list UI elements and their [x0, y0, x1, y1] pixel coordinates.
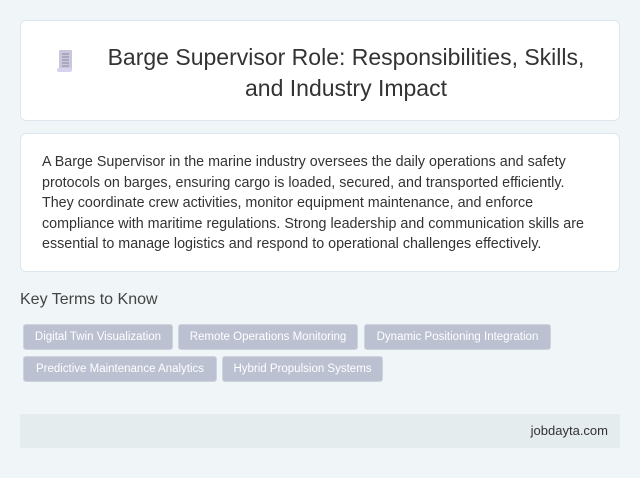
key terms heading: Key Terms to Know: [20, 291, 158, 308]
tag 2: Remote Operations Monitoring: [190, 331, 346, 343]
tag 3: Dynamic Positioning Integration: [377, 331, 538, 343]
description card: [20, 133, 620, 272]
tag 1: Digital Twin Visualization: [35, 331, 161, 343]
footer text: jobdayta.com: [531, 423, 608, 438]
tag 2: [178, 324, 358, 350]
tag 4: Predictive Maintenance Analytics: [36, 363, 204, 375]
header card: [20, 20, 620, 121]
tag 5: [222, 356, 383, 382]
icon: document: [57, 50, 72, 72]
footer: [20, 414, 620, 448]
description text: A Barge Supervisor in the marine industry oversees the daily operations and safety protocols on barges, ensuring cargo is loaded, secured, and transported efficiently. They coordinate crew activities, monitor equipment maintenance, and enforce compliance with maritime regulations. Strong leadership and communication skills are essential to manage logistics and respond to operational challenges effectively.: [42, 154, 584, 252]
title: Barge Supervisor Role: Responsibilities, Skills, and Industry Impact: [108, 44, 584, 101]
tag 4: [23, 356, 217, 382]
tag 3: [364, 324, 551, 350]
tag 1: [23, 324, 173, 350]
tag 5: Hybrid Propulsion Systems: [233, 363, 372, 375]
